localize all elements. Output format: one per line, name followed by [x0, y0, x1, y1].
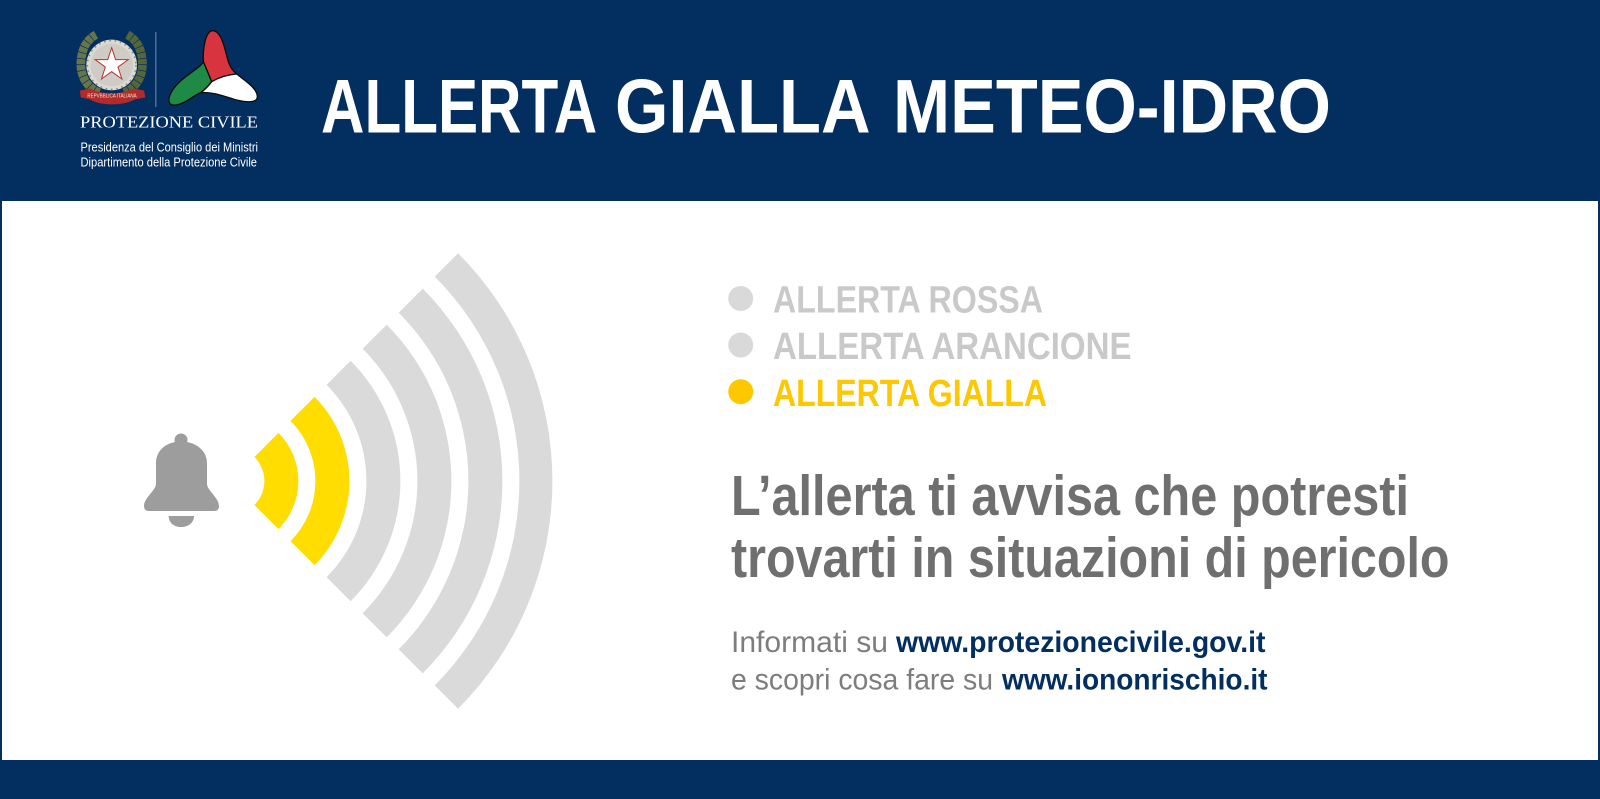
icon: Italian Republic emblem — [80, 35, 145, 104]
icon: Italian Republic emblem: REPVBBLICA ITALIANA — [87, 93, 137, 99]
icon: bell — [144, 434, 219, 527]
legend dot: yellow alert — [728, 379, 753, 404]
headline line 1: L’allerta ti avvisa che potresti — [731, 464, 1409, 528]
legend label: red alert: ALLERTA ROSSA — [773, 280, 1043, 322]
legend label: yellow alert: ALLERTA GIALLA — [773, 373, 1047, 415]
logo wordmark: PROTEZIONE CIVILE — [80, 112, 258, 132]
logo subtitle line 1: Presidenza del Consiglio dei Ministri — [80, 140, 258, 154]
logo divider — [155, 32, 156, 107]
headline line 2: trovarti in situazioni di pericolo — [731, 526, 1450, 590]
info line 1: www.protezionecivile.gov.it — [895, 626, 1266, 659]
yellow active arcs — [254, 397, 349, 565]
icon: Protezione Civile tricolour triangle — [169, 31, 257, 105]
alert level legend — [728, 280, 1132, 415]
headline message — [731, 464, 1450, 590]
logo subtitle line 2: Dipartimento della Protezione Civile — [80, 156, 257, 170]
legend dot: orange alert — [728, 332, 753, 358]
legend dot: red alert — [728, 286, 753, 311]
info line 2: e scopri cosa fare su — [731, 664, 993, 696]
grey inactive arcs — [327, 253, 552, 709]
info line 2: www.iononrischio.it — [1001, 664, 1268, 696]
header logo block — [80, 31, 258, 169]
info links — [731, 626, 1268, 696]
info line 1: Informati su — [731, 626, 888, 659]
title: GIALLA — [615, 64, 869, 150]
title: METEO-IDRO — [893, 64, 1331, 150]
title: ALLERTA — [321, 64, 596, 150]
legend label: orange alert: ALLERTA ARANCIONE — [773, 326, 1132, 368]
alert level wave arcs — [254, 253, 552, 709]
white main panel — [2, 201, 1598, 760]
